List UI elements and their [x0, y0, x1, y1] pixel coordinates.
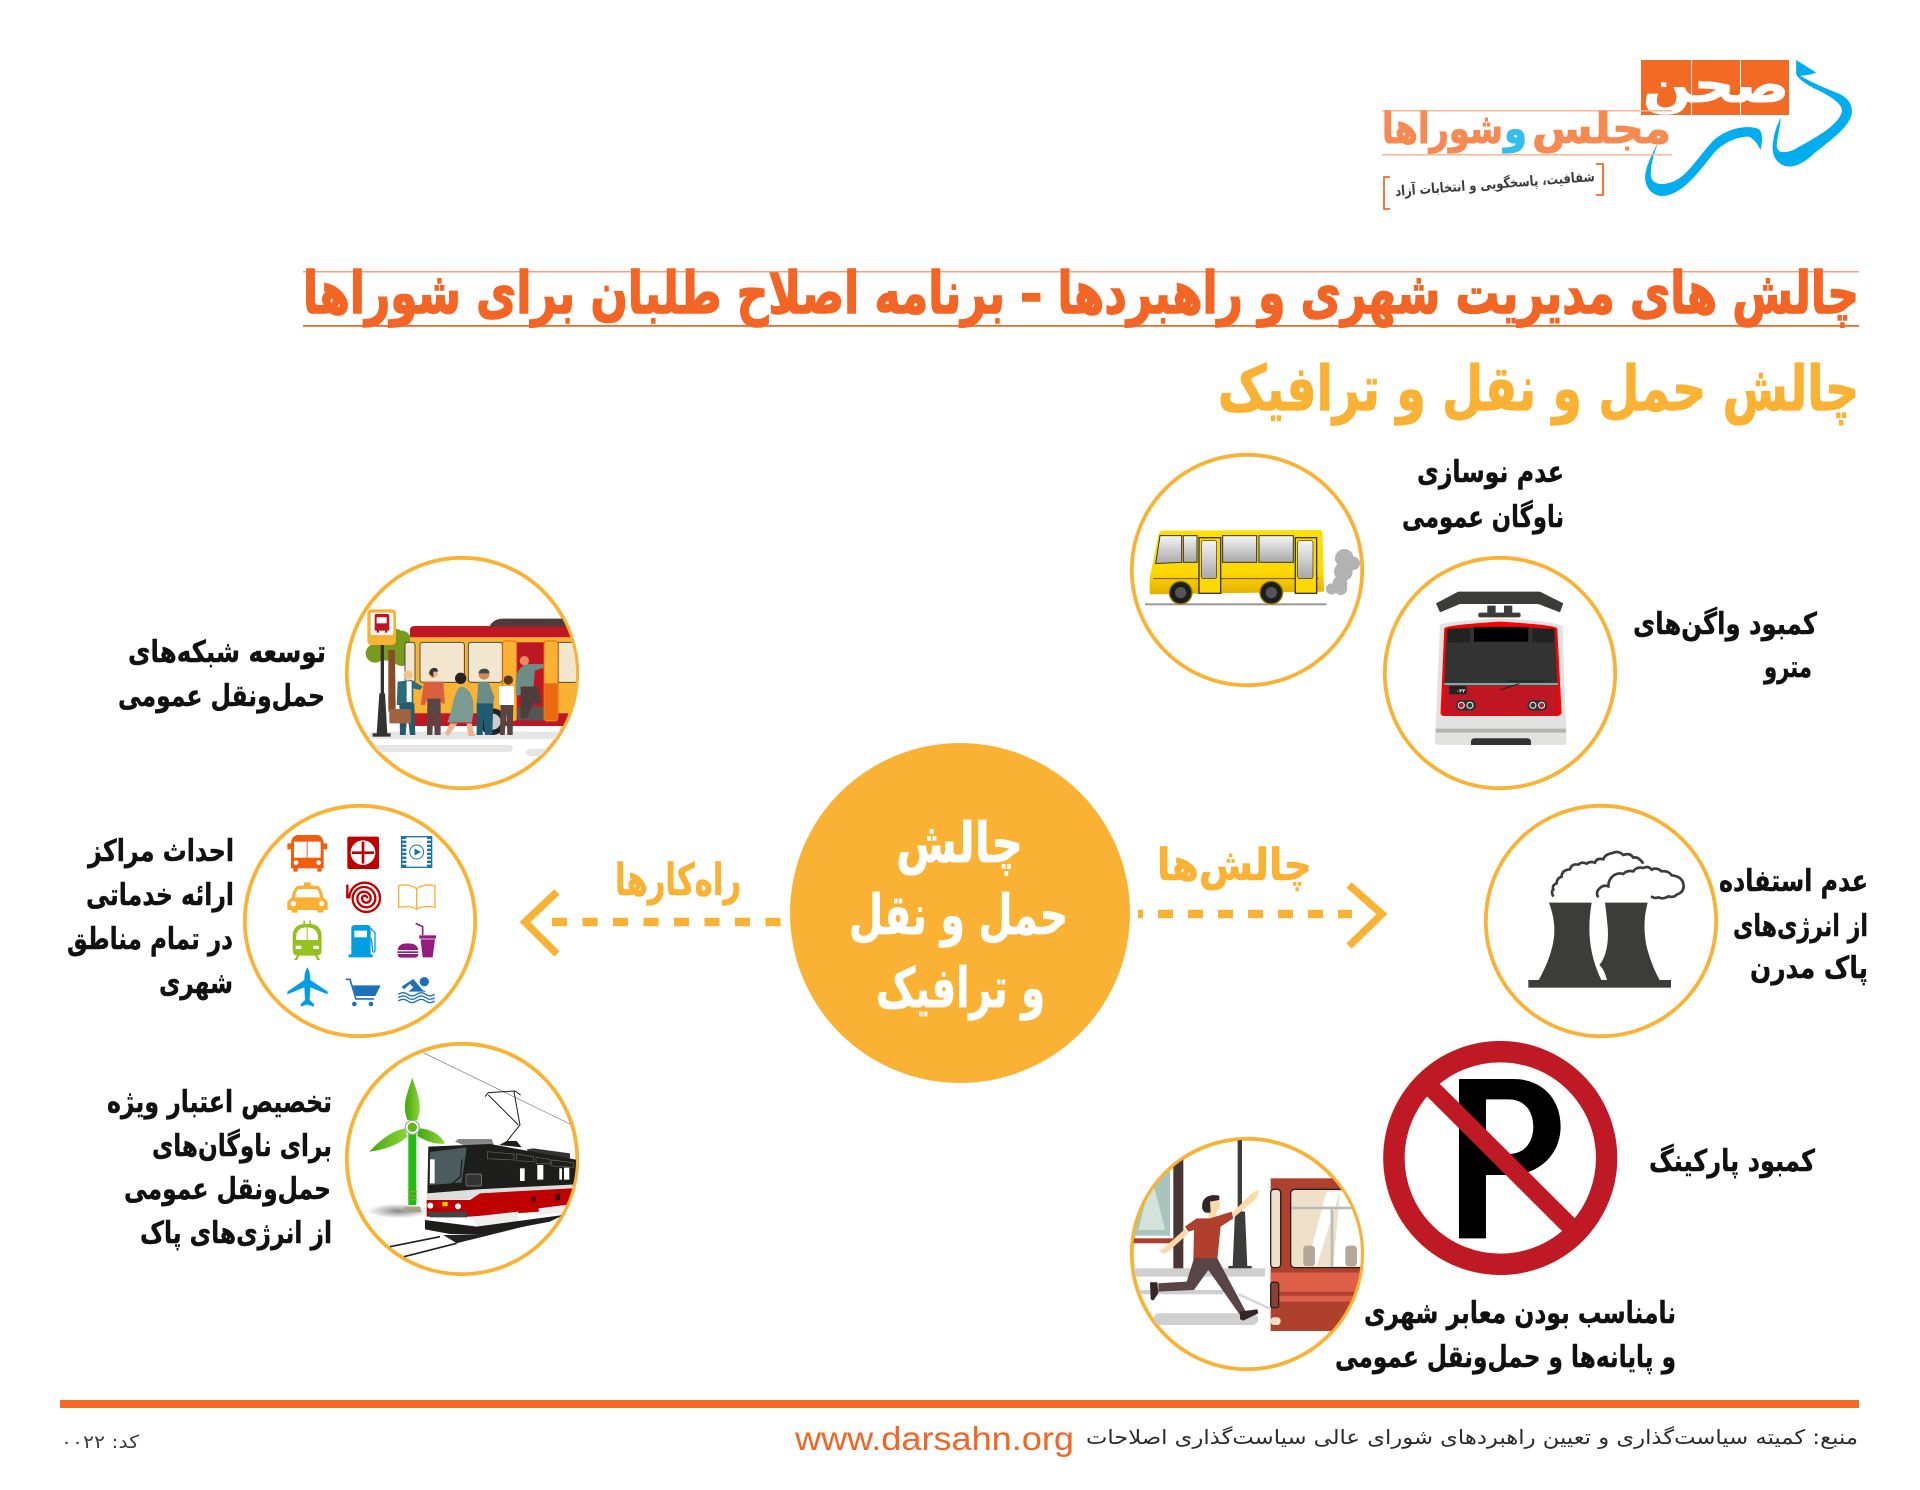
logo: council text: [1382, 104, 1672, 156]
icon: bus: [287, 835, 327, 872]
icon: food: [397, 923, 436, 958]
label: service centers: [67, 834, 234, 1001]
center circle: حمل و نقل: [849, 883, 1068, 948]
circle ring: [1132, 1139, 1362, 1369]
panel: unsuitable roads: [1130, 1139, 1676, 1375]
logo: tagline: [1384, 164, 1603, 209]
icon: man running to bus: [1130, 1140, 1367, 1331]
center circle: [790, 743, 1130, 1083]
label: fleet renewal: ناوگان عمومی: [1402, 499, 1564, 535]
label: funding: حمل‌ونقل عمومی: [124, 1172, 331, 1207]
icon: fire hose: [347, 883, 380, 912]
icon: swimmer: [398, 977, 435, 1003]
circle ring: [1486, 806, 1716, 1036]
panel: clean energy: [1486, 806, 1868, 1036]
label: clean energy: پاک مدرن: [1750, 951, 1868, 986]
center circle: چالش: [896, 811, 1023, 876]
label: challenges: چالش‌ها: [1157, 840, 1312, 891]
label: develop networks: حمل‌ونقل عمومی: [118, 679, 325, 714]
arrow: solutions: [525, 855, 783, 954]
label: parking shortage: کمبود پارکینگ: [1649, 1143, 1815, 1179]
icon: metro train: ۰۲۲: [1456, 688, 1465, 694]
label: clean energy: [1719, 864, 1868, 986]
website: www.darsahn.org: [794, 1420, 1074, 1457]
circle ring: [245, 806, 475, 1036]
logo: orange block: صحن: [1643, 56, 1789, 115]
label: service centers: احداث مراکز: [86, 834, 234, 869]
logo: [1382, 56, 1852, 209]
logo: council text: مجلس: [1532, 104, 1671, 153]
panel: public transit networks: [118, 558, 583, 788]
circle ring: [1132, 455, 1362, 685]
panel: service centers: [67, 806, 475, 1036]
logo: blue calligraphy: [1645, 60, 1852, 196]
icon: wind turbine and tram: [367, 1053, 578, 1257]
label: develop networks: [118, 635, 326, 714]
panel: metro: [1385, 558, 1817, 788]
footer: [60, 1400, 1859, 1457]
label: metro cars: مترو: [1763, 650, 1812, 685]
label: fleet renewal: عدم نوسازی: [1417, 455, 1564, 490]
icon: train: [293, 921, 322, 960]
icon: no parking sign: [1383, 1041, 1617, 1275]
label: clean energy: از انرژی‌های: [1733, 909, 1868, 944]
icon: book: [399, 885, 435, 909]
icon: metro train: [1435, 592, 1567, 745]
circle ring: [1385, 558, 1615, 788]
circle ring: [347, 1044, 577, 1274]
icon: cart: [346, 979, 381, 1006]
label: solutions: راه‌کارها: [615, 855, 741, 906]
label: roads and terminals: و پایانه‌ها و حمل‌ونقل عمومی: [1335, 1340, 1676, 1375]
label: service centers: ارائه خدماتی: [86, 878, 234, 913]
icon: cooling towers: [1528, 852, 1684, 988]
label: clean energy: عدم استفاده: [1719, 864, 1868, 899]
label: roads and terminals: نامناسب بودن معابر شهری: [1364, 1296, 1676, 1331]
label: service centers: در تمام مناطق: [67, 922, 233, 957]
people: [389, 656, 543, 737]
label: funding: از انرژی‌های پاک: [140, 1216, 332, 1251]
label: funding: تخصیص اعتبار ویژه: [107, 1085, 332, 1120]
icon: yellow bus: [1145, 530, 1360, 605]
icon: bus stop scene: [366, 609, 583, 756]
panel: clean fleet funding: [107, 1044, 578, 1274]
label: funding: [107, 1085, 332, 1251]
logo: council text: و: [1502, 104, 1527, 154]
logo: council text: شوراها: [1382, 104, 1503, 154]
icon: plane: [287, 967, 328, 1007]
label: service centers: شهری: [159, 966, 233, 1001]
label: metro cars: [1633, 606, 1817, 685]
icon: hospital: [347, 837, 379, 869]
panel: bus: [1132, 455, 1564, 685]
arrow: challenges: [1138, 840, 1382, 946]
code: کد: ۰۰۲۲: [61, 1432, 139, 1453]
icon: fuel pump: [349, 925, 375, 957]
label: metro cars: کمبود واگن‌های: [1633, 606, 1817, 642]
source: منبع: کمیته سیاست‌گذاری و تعیین راهبردهای شورای عالی سیاست‌گذاری اصلاحات: [1086, 1425, 1858, 1449]
label: develop networks: توسعه شبکه‌های: [128, 635, 326, 670]
circle ring: [347, 558, 577, 788]
panel: parking: [1383, 1041, 1815, 1275]
icon: taxi: [287, 882, 328, 913]
label: funding: برای ناوگان‌های: [152, 1128, 332, 1164]
logo: tagline: شفافیت، پاسخگویی و انتخابات آزاد: [1395, 167, 1595, 200]
label: roads and terminals: [1335, 1296, 1676, 1375]
center circle: و ترافیک: [876, 956, 1045, 1021]
icon: cinema: [402, 837, 432, 867]
icon grid: services: [287, 835, 436, 1007]
label: fleet renewal: [1402, 455, 1564, 535]
